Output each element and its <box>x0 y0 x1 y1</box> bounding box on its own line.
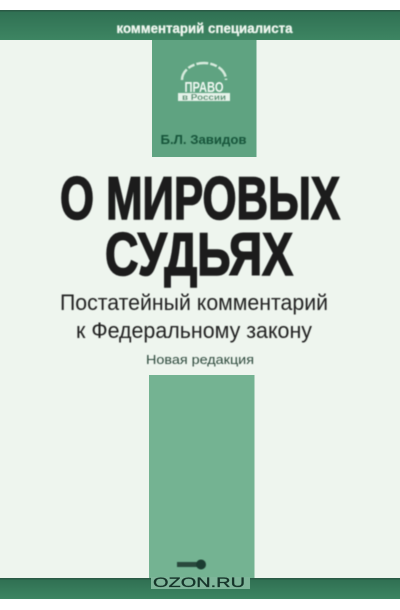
title: СУДЬЯХ <box>105 221 293 288</box>
upper green panel <box>152 40 256 157</box>
subtitle <box>60 290 328 343</box>
icon: publisher mark <box>177 560 206 570</box>
lower green panel <box>149 375 254 580</box>
top green band <box>0 10 400 40</box>
icon: publisher logo: в России <box>182 93 226 102</box>
icon: publisher logo <box>178 63 230 102</box>
series label: комментарий специалиста <box>116 20 293 36</box>
watermark panel <box>151 577 250 589</box>
watermark: OZON.RU <box>153 575 245 590</box>
edition note: Новая редакция <box>146 352 254 367</box>
title <box>60 165 340 288</box>
subtitle: Постатейный комментарий <box>60 290 328 315</box>
subtitle: к Федеральному закону <box>76 318 313 343</box>
bottom green band <box>0 578 400 599</box>
icon: publisher logo: ПРАВО <box>184 79 224 96</box>
author: Б.Л. Завидов <box>160 132 247 147</box>
